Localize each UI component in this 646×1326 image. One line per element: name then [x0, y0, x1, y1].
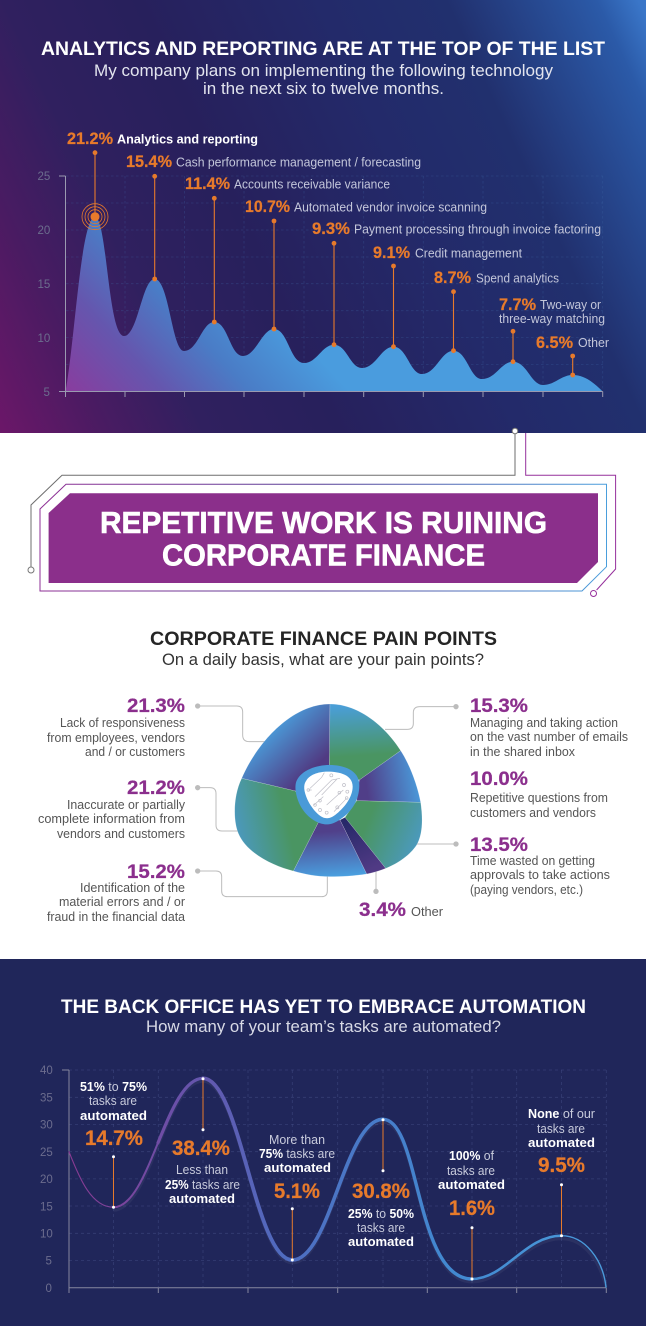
banner: repetitive work	[28, 428, 616, 596]
heading: analytics and reporting: ANALYTICS AND REPORTING ARE AT THE TOP OF THE LIST	[41, 38, 605, 60]
pain points: left labels: fraud in the financial data	[47, 910, 185, 924]
chart labels: 11.4%	[185, 174, 230, 193]
label: 38.4%: 25% tasks are	[165, 1178, 240, 1192]
pain points: other label	[359, 899, 443, 921]
line chart: automated tasks: 10	[40, 1228, 53, 1240]
line chart: automated tasks: 5	[46, 1256, 52, 1268]
pain points: right labels: in the shared inbox	[470, 745, 576, 759]
pain points: left labels: Lack of responsiveness	[60, 716, 185, 730]
pain points: left labels	[38, 695, 186, 924]
chart labels: 7.7%	[499, 295, 536, 314]
label: 30.8%: 25% to 50%	[348, 1207, 414, 1221]
chart labels: Two-way or	[540, 298, 601, 312]
chart labels	[67, 129, 609, 352]
pain points: right labels: Time wasted on getting	[470, 854, 595, 868]
heading: back office: THE BACK OFFICE HAS YET TO EMBRACE AUTOMATION	[61, 996, 586, 1018]
chart labels: 15.4%	[126, 152, 172, 171]
chart labels: Cash performance management / forecasting	[176, 156, 421, 170]
area chart: technology adoption: 15	[38, 279, 50, 291]
heading: banner title: REPETITIVE WORK IS RUINING	[100, 505, 547, 540]
chart labels: Analytics and reporting	[117, 132, 258, 146]
label: 30.8%: tasks are	[357, 1221, 405, 1235]
chart labels: 6.5%	[536, 333, 573, 352]
pain points: right labels: 13.5%	[470, 834, 528, 856]
label: 38.4%: Less than	[176, 1163, 228, 1177]
heading: pain points: CORPORATE FINANCE PAIN POINTS	[150, 628, 497, 650]
pain points: right labels: on the vast number of emails	[470, 730, 628, 744]
label: 9.5%: 9.5%	[538, 1154, 585, 1177]
chart labels: 10.7%	[245, 197, 290, 216]
heading: banner title: CORPORATE FINANCE	[162, 538, 485, 572]
curve	[69, 1078, 606, 1287]
line chart: automated tasks: 30	[40, 1120, 53, 1132]
pain points: right labels: Repetitive questions from	[470, 791, 608, 805]
label: 5.1%: 5.1%	[274, 1180, 320, 1203]
label: 38.4%	[165, 1137, 240, 1206]
line chart: automated tasks: 0	[46, 1283, 52, 1295]
curve shadow	[114, 1081, 606, 1287]
pain points: right labels: (paying vendors, etc.)	[470, 883, 583, 897]
subheading: technology plans	[94, 62, 554, 98]
chart labels: Accounts receivable variance	[234, 178, 390, 192]
icon: highlight rings on top value	[82, 204, 108, 230]
chart labels: three-way matching	[499, 312, 605, 326]
line chart: automated tasks: 40	[40, 1065, 53, 1077]
label: 30.8%	[348, 1180, 414, 1249]
label: 5.1%: 75% tasks are	[259, 1147, 335, 1161]
subheading: technology plans: My company plans on implementing the following technology	[94, 62, 554, 80]
pie segments	[235, 704, 422, 877]
label: 1.6%: automated	[438, 1178, 505, 1192]
pain points: left labels: Identification of the	[80, 881, 185, 895]
chart labels: 9.1%	[373, 243, 410, 262]
pain points: other label: 3.4%	[359, 899, 406, 921]
chart labels: Automated vendor invoice scanning	[294, 200, 487, 214]
pain points: left labels: from employees, vendors	[47, 731, 185, 745]
chart labels: 9.3%	[312, 219, 350, 238]
pain points: right labels: 10.0%	[470, 768, 528, 790]
label: 9.5%: None of our	[528, 1107, 595, 1121]
marker stems	[112, 1077, 563, 1280]
label: 1.6%: 100% of	[449, 1149, 495, 1163]
icon: circuit core	[295, 765, 359, 824]
label: 1.6%: tasks are	[447, 1164, 495, 1178]
chart labels: 21.2%	[67, 129, 113, 148]
pain points: left labels: 21.3%	[127, 695, 185, 717]
pain points: other label: Other	[411, 905, 443, 919]
subheading: automated tasks: How many of your team’s tasks are automated?	[146, 1018, 501, 1036]
label: 30.8%: automated	[348, 1235, 414, 1249]
heading: banner title	[100, 505, 547, 572]
area chart: technology adoption: 20	[38, 225, 50, 237]
pain points: left labels: complete information from	[38, 812, 185, 826]
line chart: automated tasks: 25	[40, 1147, 53, 1159]
label: 5.1%: More than	[269, 1133, 325, 1147]
panel: back office automation	[0, 959, 646, 1326]
chart labels: Other	[578, 336, 609, 350]
label: 14.7%: 51% to 75%	[80, 1080, 147, 1094]
area chart: technology adoption: 10	[38, 333, 50, 345]
area chart: technology adoption	[38, 171, 603, 399]
subheading: technology plans: in the next six to twelve months.	[203, 80, 444, 98]
label: 1.6%	[438, 1149, 505, 1220]
label: 14.7%: 14.7%	[85, 1127, 143, 1150]
label: 9.5%: tasks are	[537, 1122, 585, 1136]
pain points: left labels: Inaccurate or partially	[67, 798, 186, 812]
chart labels: Spend analytics	[476, 272, 559, 286]
line chart: automated tasks	[40, 1065, 606, 1295]
label: 14.7%: automated	[80, 1109, 147, 1123]
label: 9.5%: automated	[528, 1136, 595, 1150]
chart labels: 8.7%	[434, 268, 471, 287]
connector lines	[195, 703, 459, 897]
label: 9.5%	[528, 1107, 595, 1177]
marker stems	[93, 150, 575, 377]
panel: technology plans	[0, 0, 646, 433]
chart labels: Payment processing through invoice factoring	[354, 222, 601, 236]
pain points: right labels: approvals to take actions	[470, 868, 610, 882]
chart: pain point blob pie	[195, 703, 459, 897]
line chart: automated tasks: 35	[40, 1092, 53, 1104]
pain points: left labels: 21.2%	[127, 777, 185, 799]
pain points: left labels: and / or customers	[85, 745, 185, 759]
line chart: automated tasks: 20	[40, 1174, 53, 1186]
label: 30.8%: 30.8%	[352, 1180, 410, 1203]
label: 5.1%: automated	[264, 1161, 331, 1175]
pain points: left labels: 15.2%	[127, 861, 185, 883]
line chart: automated tasks: 15	[40, 1202, 53, 1214]
label: 38.4%: 38.4%	[172, 1137, 230, 1160]
area chart: technology adoption: 25	[38, 171, 50, 183]
area chart: technology adoption: 5	[44, 387, 50, 399]
label: 14.7%: tasks are	[89, 1094, 137, 1108]
pain points: left labels: vendors and customers	[57, 827, 185, 841]
subheading: pain points: On a daily basis, what are your pain points?	[162, 651, 484, 669]
label: 5.1%	[259, 1133, 335, 1203]
pain points: right labels: Managing and taking action	[470, 716, 618, 730]
label: 1.6%: 1.6%	[449, 1197, 495, 1220]
chart labels: Credit management	[415, 246, 523, 260]
pain points: right labels: customers and vendors	[470, 806, 596, 820]
pain points: left labels: material errors and / or	[59, 895, 185, 909]
label: 38.4%: automated	[169, 1192, 235, 1206]
panel: white middle section	[0, 433, 646, 959]
label: 14.7%	[80, 1080, 147, 1150]
pain points: right labels	[470, 695, 628, 897]
pain points: right labels: 15.3%	[470, 695, 528, 717]
